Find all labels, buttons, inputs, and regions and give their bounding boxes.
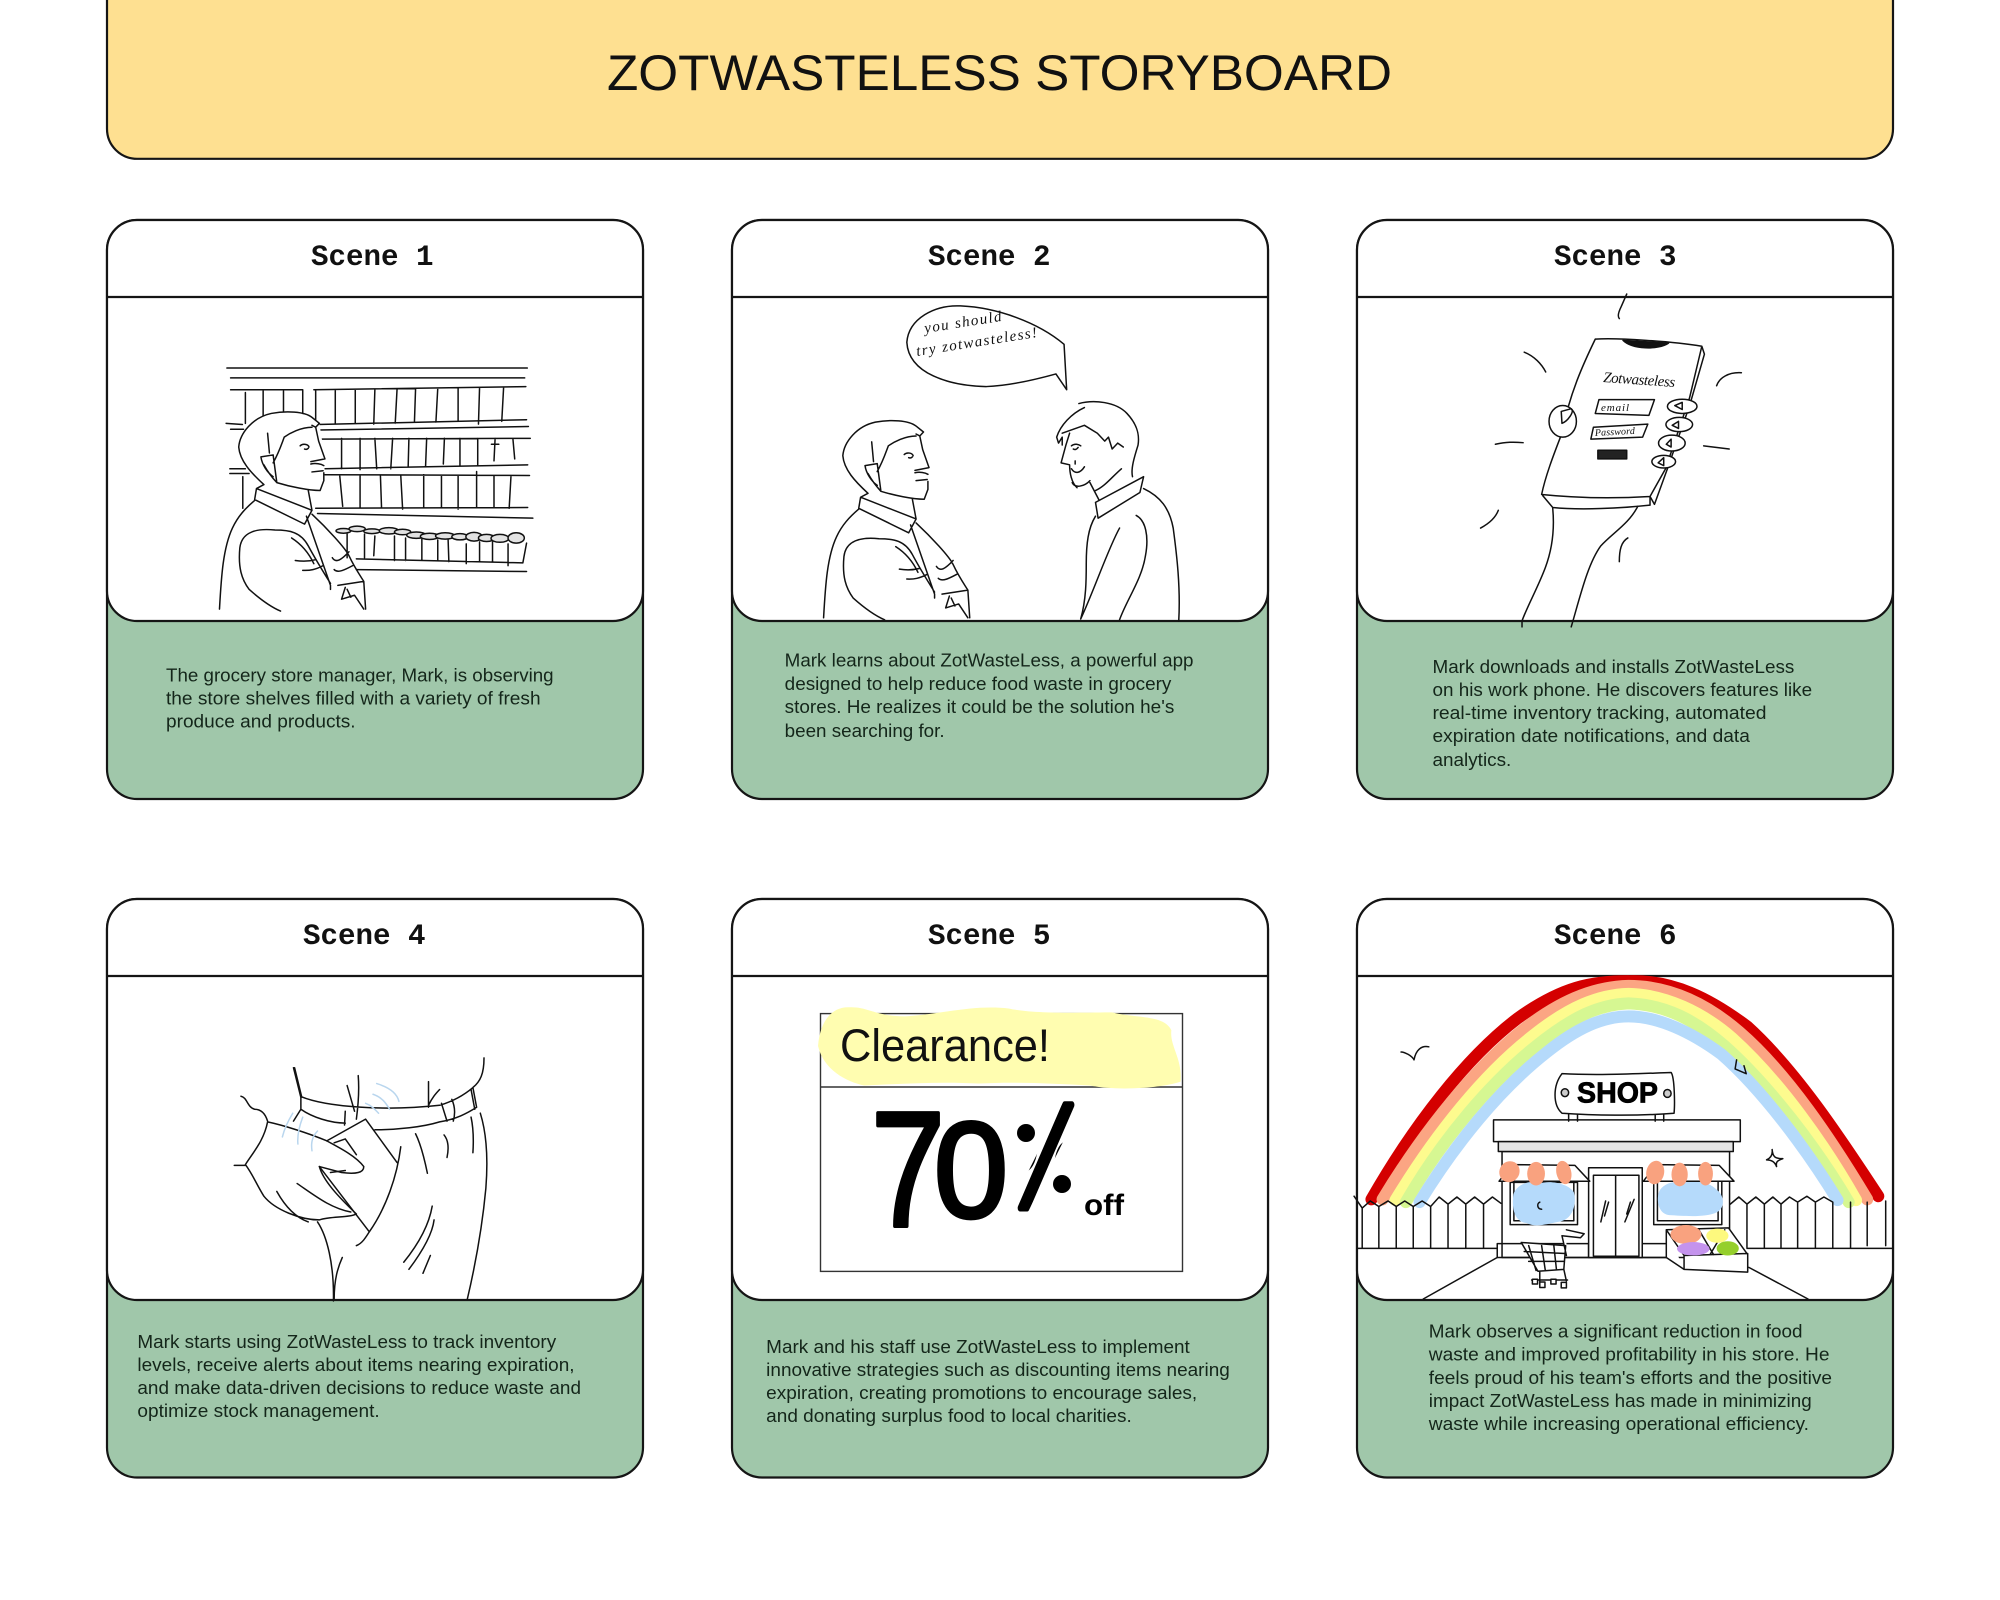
scene 2 description: designed to help reduce food waste in grocery: [785, 673, 1172, 694]
phone screen text: Password: [1594, 426, 1636, 439]
scene 4 description: [137, 1331, 581, 1421]
panel: scene 3: [1357, 220, 1893, 799]
heading: scene 2: Scene 2: [928, 241, 1050, 274]
title banner: [107, 0, 1893, 159]
phone screen text: email: [1601, 402, 1629, 414]
shop sign label: SHOP: [1577, 1078, 1658, 1110]
scene 4 description: optimize stock management.: [137, 1400, 380, 1421]
scene 5 description: [766, 1336, 1230, 1426]
scene 4 description: Mark starts using ZotWasteLess to track inventory: [137, 1331, 557, 1352]
motion rays: [1481, 294, 1741, 562]
fence: [1354, 1196, 1892, 1299]
rainbow: [1371, 981, 1878, 1202]
handwriting in speech bubble: you should: [921, 309, 1003, 337]
scene 6 description: waste and improved profitability in his store. He: [1428, 1344, 1830, 1365]
phone screen text: [1594, 370, 1676, 439]
scene 1 description: produce and products.: [166, 711, 356, 732]
sketch: shop under a rainbow: [1354, 981, 1892, 1299]
heading: scene 6: Scene 6: [1554, 920, 1676, 953]
scene 6 description: [1428, 1321, 1832, 1434]
clearance sign: [818, 1007, 1182, 1271]
scene 6 description: waste while increasing operational efficiency.: [1428, 1413, 1809, 1434]
scene 1 description: the store shelves filled with a variety of fresh: [166, 687, 541, 708]
scene 2 description: stores. He realizes it could be the solution he's: [785, 696, 1174, 717]
scene 1 description: The grocery store manager, Mark, is observing: [166, 664, 554, 685]
scene 2 description: been searching for.: [785, 720, 945, 741]
shop sign: [1569, 1114, 1664, 1121]
title: ZOTWASTELESS STORYBOARD: [607, 45, 1392, 101]
sketch: Mark observing store shelves: [219, 368, 533, 611]
sketch: hand holding phone with app login: [1481, 294, 1741, 627]
panel: scene 1: [107, 220, 643, 799]
Mark figure: [824, 421, 970, 620]
panel: scene 2: [732, 220, 1268, 799]
phone notch: [1623, 340, 1669, 348]
heading: scene 5: Scene 5: [928, 920, 1050, 953]
70 percent text: 0: [934, 1094, 1008, 1246]
scene 6 description: Mark observes a significant reduction in food: [1429, 1321, 1803, 1342]
colleague figure: [1057, 402, 1179, 621]
arm: [1522, 506, 1638, 627]
yellow highlighter: [818, 1007, 1181, 1088]
scene 5 description: and donating surplus food to local charities.: [766, 1405, 1132, 1426]
scene 2 description: Mark learns about ZotWasteLess, a powerful app: [785, 649, 1194, 670]
vibration lines: [282, 1084, 399, 1151]
scene 3 description: real-time inventory tracking, automated: [1432, 702, 1766, 723]
scene 6 description: impact ZotWasteLess has made in minimizing: [1429, 1390, 1812, 1411]
speech bubble: [907, 306, 1067, 390]
clearance text: Clearance!: [840, 1020, 1050, 1071]
scene 3 description: on his work phone. He discovers features like: [1432, 679, 1812, 700]
bird and sparkles: [1401, 1047, 1783, 1167]
awnings: [1499, 1165, 1734, 1181]
sketch: hand reaching into pocket for vibrating phone: [234, 1058, 487, 1301]
percent sign dots: [1017, 1124, 1071, 1193]
scene 4 description: levels, receive alerts about items nearing expiration,: [137, 1354, 575, 1375]
scene 1 description: [166, 664, 554, 732]
phone in pocket: [327, 1119, 397, 1172]
phone body: [1542, 339, 1704, 509]
off label: off: [1084, 1189, 1125, 1222]
scene 3 description: [1432, 656, 1812, 770]
scene 5 description: Mark and his staff use ZotWasteLess to implement: [766, 1336, 1190, 1357]
panel: scene 4: [107, 899, 643, 1478]
70 percent text: [876, 1101, 1074, 1228]
handwriting in speech bubble: try zotwasteless!: [915, 325, 1038, 360]
scene 5 description: innovative strategies such as discounting items nearing: [766, 1359, 1230, 1380]
produce crate: [1666, 1228, 1748, 1272]
scene 4 description: and make data-driven decisions to reduce waste and: [137, 1377, 581, 1398]
heading: scene 1: Scene 1: [311, 241, 434, 274]
login button: [1598, 450, 1627, 459]
sketch: Mark and colleague talking: [824, 306, 1179, 621]
store building: [1502, 1152, 1730, 1257]
phone screen text: Zotwasteless: [1603, 370, 1676, 391]
70 percent text: %: [1002, 1072, 1090, 1240]
shopping cart: [1521, 1230, 1584, 1281]
trousers and belt: [293, 1058, 487, 1301]
windows: [1510, 1181, 1722, 1225]
panel: scene 5: [732, 899, 1268, 1478]
panel: scene 6: [1354, 899, 1893, 1478]
scene 2 description: [785, 649, 1194, 741]
scene 3 description: expiration date notifications, and data: [1432, 725, 1751, 746]
hand: [234, 1096, 364, 1222]
scene 3 description: analytics.: [1432, 749, 1511, 770]
70 percent text: 7: [871, 1078, 945, 1261]
scene 3 description: Mark downloads and installs ZotWasteLess: [1432, 656, 1794, 677]
scene 6 description: feels proud of his team's efforts and the positive: [1429, 1367, 1832, 1388]
scene 5 description: expiration, creating promotions to encourage sales,: [766, 1382, 1197, 1403]
thumb and fingers: [1549, 399, 1697, 468]
heading: scene 4: Scene 4: [303, 920, 426, 953]
heading: scene 3: Scene 3: [1554, 241, 1676, 274]
handwriting in speech bubble: [915, 309, 1038, 360]
